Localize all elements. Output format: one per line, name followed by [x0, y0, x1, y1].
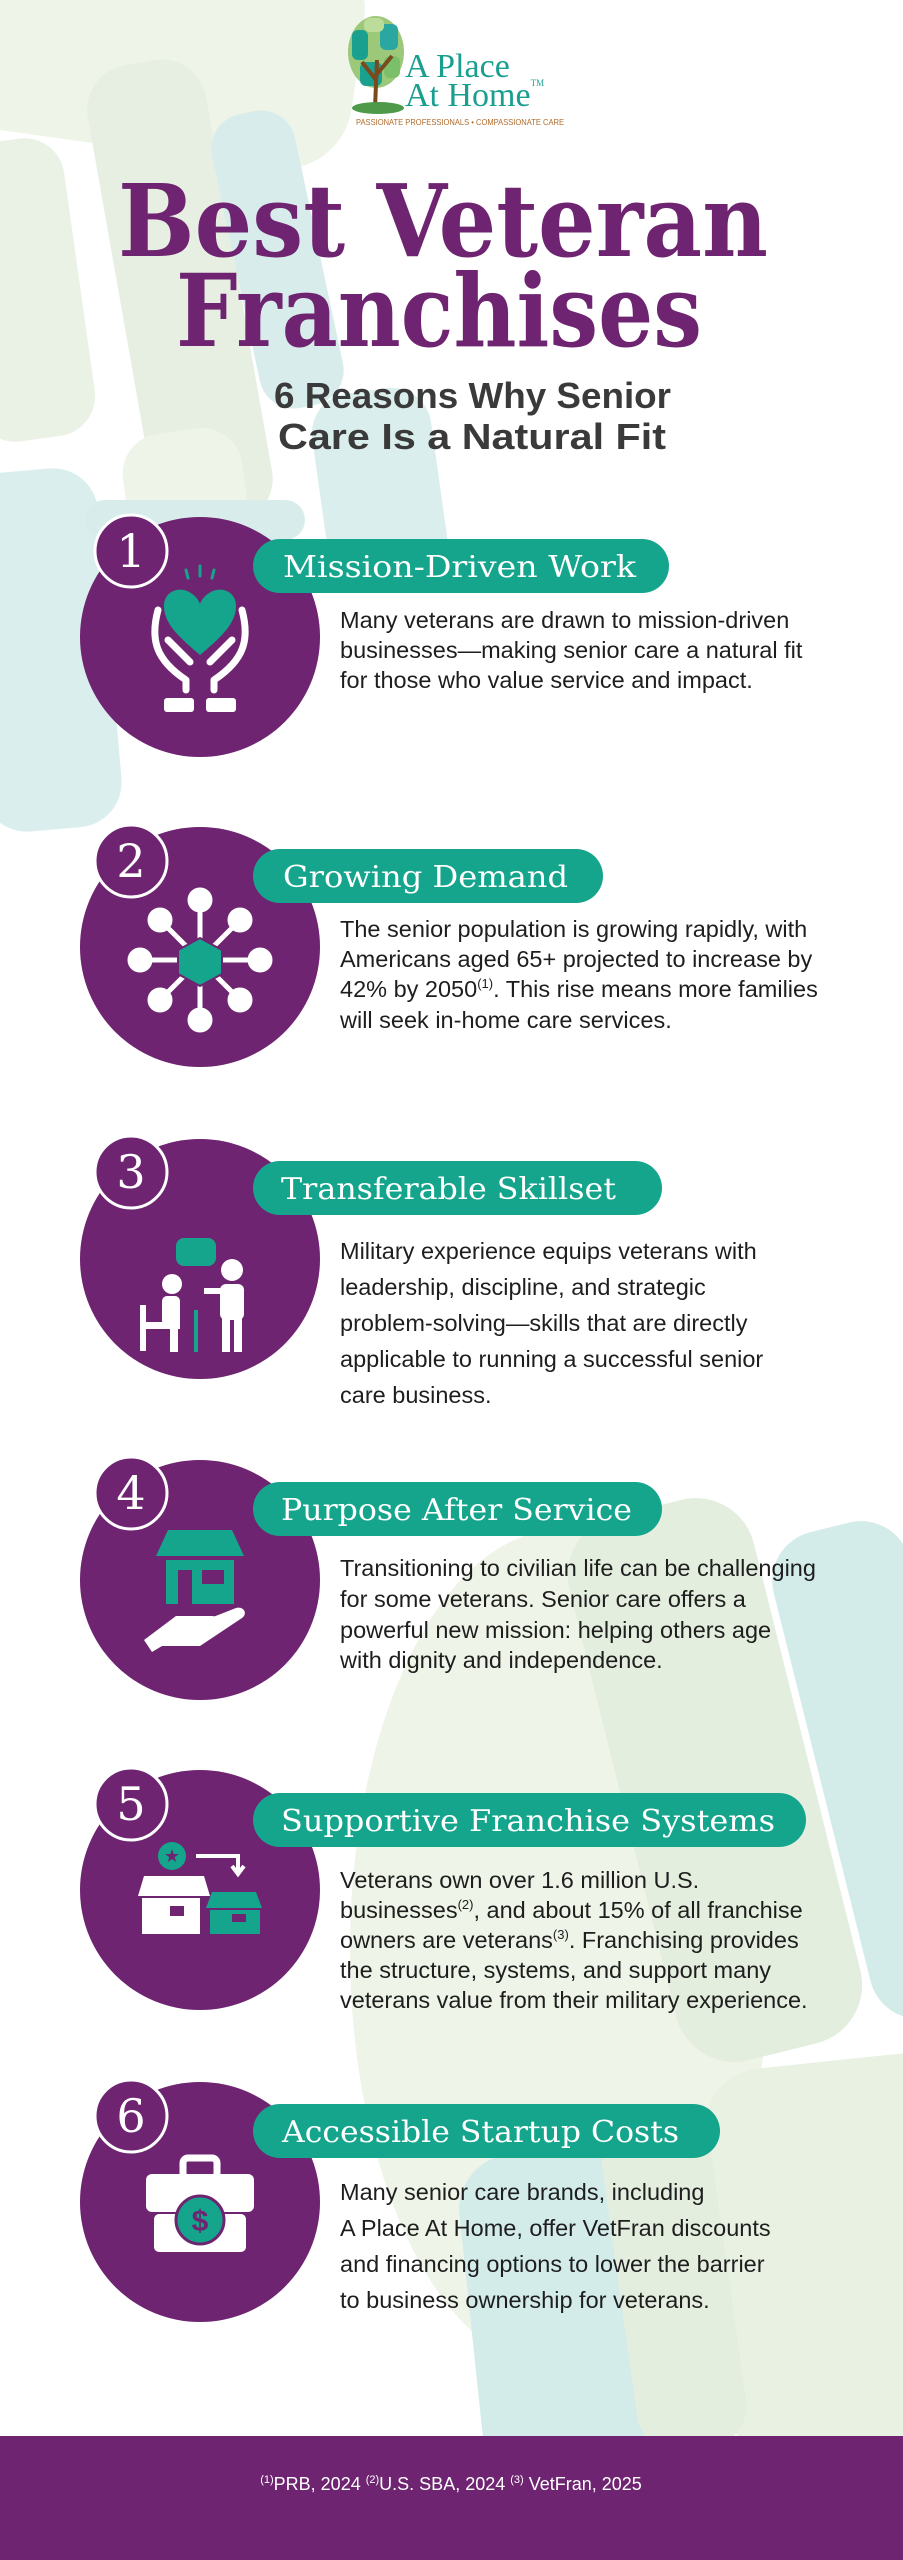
body text: . This rise means more families: [493, 976, 818, 1002]
heading pill: Purpose After Service: [281, 1493, 632, 1528]
heading pill: [253, 1793, 806, 1847]
body text: Veterans own over 1.6 million U.S.: [340, 1867, 699, 1893]
body text: [340, 1238, 763, 1408]
subtitle: 6 Reasons Why Senior: [274, 375, 671, 416]
body text: [339, 916, 818, 1033]
panel: 1 mission-driven work: [80, 515, 803, 757]
badge 6: [95, 2080, 167, 2152]
icon: tree: [348, 16, 404, 114]
panel: 3 transferable skillset: [80, 1136, 763, 1408]
body text: owners are veterans: [340, 1927, 553, 1953]
logo: [348, 16, 564, 127]
body text: Military experience equips veterans with: [340, 1238, 757, 1264]
body text: [340, 1867, 808, 2013]
footer: [0, 2436, 903, 2560]
heading pill: Accessible Startup Costs: [281, 2115, 679, 2150]
body text: applicable to running a successful senior: [340, 1346, 763, 1372]
footnotes: PRB, 2024: [274, 2474, 366, 2494]
logo: TM: [531, 78, 544, 88]
background shapes top-left: [0, 0, 453, 835]
body text: businesses: [340, 1897, 458, 1923]
icon: two people talking: [140, 1238, 244, 1352]
heading pill: [253, 539, 669, 593]
body text: leadership, discipline, and strategic: [340, 1274, 706, 1300]
body text: veterans value from their military experience.: [340, 1987, 808, 2013]
body text: for those who value service and impact.: [340, 667, 753, 693]
footnotes: U.S. SBA, 2024: [379, 2474, 510, 2494]
body text: (1): [477, 976, 493, 991]
body text: The senior population is growing rapidly, with: [340, 916, 807, 942]
body text: A Place At Home, offer VetFran discounts: [340, 2215, 771, 2241]
icon: network cube: [130, 890, 270, 1030]
body text: care business.: [340, 1382, 492, 1408]
title: Franchises: [176, 252, 702, 370]
body text: . Franchising provides: [569, 1927, 799, 1953]
panel: 4 purpose after service: [80, 1457, 816, 1700]
badge 2: 2: [116, 834, 146, 888]
icon: franchise stores: ★: [164, 1846, 180, 1867]
badge 2: [95, 825, 167, 897]
body text: Many veterans are drawn to mission-driven: [340, 607, 789, 633]
icon: franchise stores: [138, 1842, 262, 1934]
icon: briefcase with dollar: [146, 2158, 254, 2252]
icon: hands with heart: [155, 566, 245, 712]
badge 6: 6: [116, 2089, 146, 2143]
body text: problem-solving—skills that are directly: [340, 1310, 748, 1336]
body text: (3): [553, 1927, 569, 1942]
body text: powerful new mission: helping others age: [340, 1617, 771, 1643]
logo: At Home: [405, 77, 531, 114]
body text: Many senior care brands, including: [340, 2179, 704, 2205]
heading pill: Mission-Driven Work: [283, 550, 637, 585]
subtitle: [274, 375, 671, 457]
badge 5: 5: [116, 1777, 146, 1831]
body text: 42% by 2050: [340, 976, 477, 1002]
logo: PASSIONATE PROFESSIONALS • COMPASSIONATE CARE: [356, 117, 564, 127]
heading pill: [253, 849, 603, 903]
body text: to business ownership for veterans.: [340, 2287, 710, 2313]
body text: Americans aged 65+ projected to increase by: [340, 946, 812, 972]
body text: [340, 607, 803, 693]
badge 1: 1: [116, 524, 146, 578]
body text: [340, 2179, 771, 2313]
title: Best Veteran: [118, 162, 768, 280]
footnotes: VetFran, 2025: [524, 2474, 642, 2494]
body text: (2): [458, 1897, 473, 1912]
title: [118, 162, 768, 370]
badge 1: [95, 515, 167, 587]
footnotes: (3): [510, 2474, 524, 2486]
heading pill: Supportive Franchise Systems: [281, 1804, 775, 1839]
heading pill: [253, 1482, 662, 1536]
panel: 6 accessible startup costs: [80, 2080, 771, 2322]
footnotes: (2): [366, 2474, 379, 2486]
body text: Transitioning to civilian life can be challenging: [340, 1555, 816, 1581]
badge 3: [95, 1136, 167, 1208]
badge 5: [95, 1768, 167, 1840]
body text: for some veterans. Senior care offers a: [340, 1586, 747, 1612]
logo text: A Place: [405, 48, 510, 85]
body text: will seek in-home care services.: [339, 1007, 672, 1033]
background shapes bottom-right: [350, 1485, 903, 2492]
body text: businesses—making senior care a natural fit: [340, 637, 803, 663]
body text: and financing options to lower the barrier: [340, 2251, 765, 2277]
body text: the structure, systems, and support many: [340, 1957, 771, 1983]
body text: with dignity and independence.: [339, 1647, 663, 1673]
heading pill: [253, 1161, 662, 1215]
badge 4: 4: [116, 1466, 146, 1520]
panel: 5 supportive franchise systems: [80, 1768, 808, 2013]
body text: , and about 15% of all franchise: [473, 1897, 803, 1923]
panel: 2 growing demand: [80, 825, 818, 1067]
icon: store in hand: [144, 1530, 245, 1652]
body text: [339, 1555, 816, 1673]
heading pill: Transferable Skillset: [281, 1172, 616, 1207]
footnotes: (1): [260, 2474, 274, 2486]
badge 4: [95, 1457, 167, 1529]
heading pill: Growing Demand: [283, 860, 568, 895]
subtitle: Care Is a Natural Fit: [278, 416, 666, 457]
heading pill: [253, 2104, 720, 2158]
icon: briefcase with dollar: $: [192, 2205, 209, 2238]
badge 3: 3: [116, 1145, 146, 1199]
